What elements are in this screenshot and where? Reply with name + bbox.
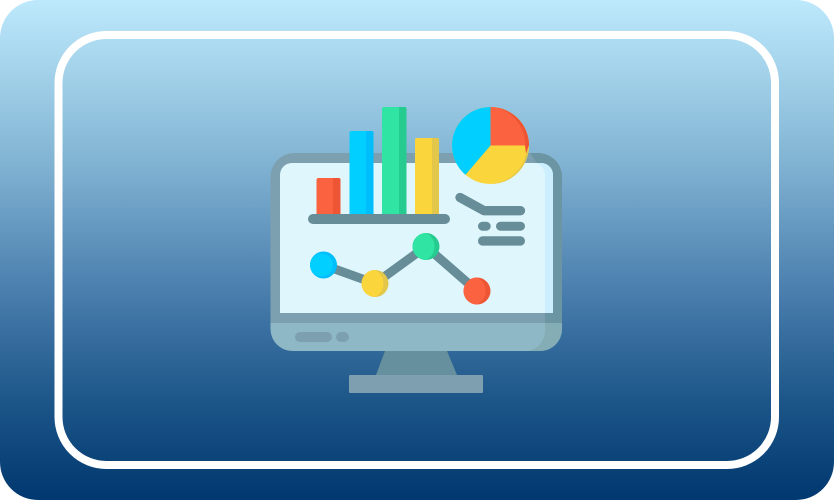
long pill [478, 236, 525, 246]
chin buttons [295, 332, 349, 342]
yellow point [362, 270, 388, 297]
monitor bezel [270, 153, 562, 323]
blue bar [350, 131, 374, 214]
medium pill [496, 222, 525, 231]
monitor [270, 153, 562, 393]
chin right shade [526, 323, 562, 351]
screen [280, 163, 553, 313]
line connectors [324, 246, 477, 291]
bar chart [308, 107, 450, 224]
yellow bar [415, 138, 439, 214]
monitor stand [376, 351, 457, 375]
blue slice [452, 107, 490, 175]
red bar [316, 178, 340, 214]
chart shelf [308, 214, 450, 224]
text placeholder lines [460, 198, 525, 246]
white rounded frame [58, 35, 775, 465]
yellow slice shade [490, 146, 529, 184]
elbow line [460, 198, 520, 211]
blue point [310, 252, 337, 278]
yellow slice [452, 107, 529, 184]
red point [463, 278, 490, 304]
monitor base [349, 375, 483, 393]
green bar [382, 107, 406, 214]
monitor chin [270, 323, 562, 351]
bezel right shade [530, 153, 562, 323]
screen right strip [533, 163, 553, 313]
red slice [490, 107, 529, 146]
red slice shade [496, 108, 529, 154]
short pill [478, 222, 491, 231]
line chart [310, 233, 490, 304]
pie chart [452, 107, 529, 184]
green point [412, 233, 440, 260]
